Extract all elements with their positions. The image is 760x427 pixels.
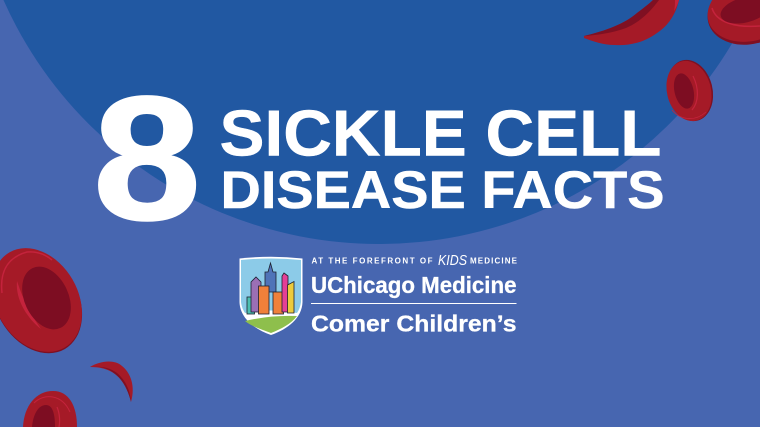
numeral 8: 8	[93, 61, 201, 257]
icon: red blood cell top right	[701, 0, 760, 53]
icon: small sickle cell bottom left	[90, 362, 133, 402]
icon: red blood cell bottom left	[23, 391, 77, 427]
heading line: disease facts: DISEASE FACTS	[220, 161, 664, 220]
tagline	[312, 252, 518, 269]
heading line: sickle cell: SICKLE CELL	[220, 96, 662, 170]
title	[93, 61, 664, 257]
brand name: comer children's: Comer Children’s	[311, 310, 516, 336]
icon: sickle cell top	[584, 0, 679, 45]
dark blue circle	[0, 0, 760, 244]
tagline: AT THE FOREFRONT OF	[312, 256, 433, 266]
brand name: uchicago medicine: UChicago Medicine	[311, 272, 516, 298]
icon: shield with skyline	[240, 257, 302, 335]
icon: red blood cell right	[660, 55, 719, 126]
icon: large red blood cell left	[0, 232, 100, 370]
hand-drawn word: kids: KIDS	[438, 252, 467, 269]
buildings	[247, 263, 294, 314]
divider	[311, 303, 516, 304]
logo	[240, 252, 518, 336]
tagline: MEDICINE	[470, 256, 518, 266]
